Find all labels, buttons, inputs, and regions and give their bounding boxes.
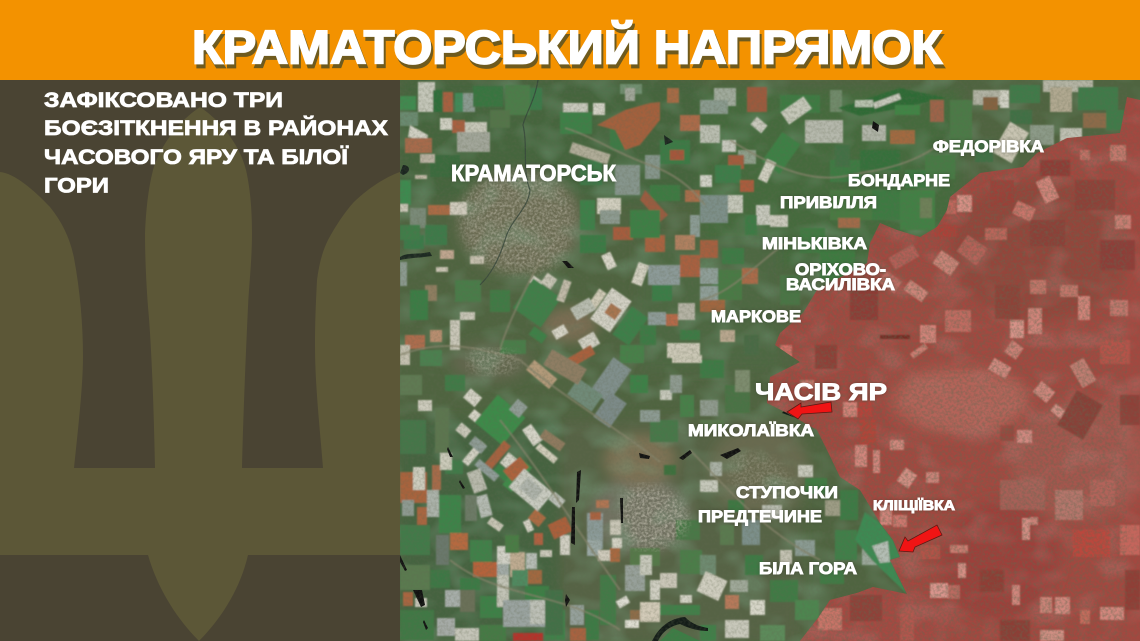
side summary text: ГОРИ xyxy=(44,174,109,198)
label: Orikhovo-Vasylivka xyxy=(786,261,895,294)
label: Mykolaivka: МИКОЛАЇВКА xyxy=(688,422,814,440)
label: Stupochky: СТУПОЧКИ xyxy=(736,484,838,502)
side summary text: БОЄЗІТКНЕННЯ В РАЙОНАХ xyxy=(44,115,389,140)
label: Fedorivka: ФЕДОРІВКА xyxy=(933,138,1044,156)
red overlay: Chasiv Yar town texture xyxy=(912,379,1016,424)
label: Orikhovo-Vasylivka: ОРІХОВО- xyxy=(795,261,886,279)
map labels: settlements xyxy=(451,138,1044,578)
label: Minkivka: МІНЬКІВКА xyxy=(762,235,867,253)
label: Markove: МАРКОВЕ xyxy=(711,308,801,326)
map: base terrain xyxy=(400,80,1140,641)
map: farm fields south-west xyxy=(400,345,907,641)
title: КРАМАТОРСЬКИЙ НАПРЯМОК xyxy=(192,20,942,74)
label: Bondarne: БОНДАРНЕ xyxy=(848,172,950,190)
label: Bila Hora: БІЛА ГОРА xyxy=(759,560,857,578)
arrow: towards Chasiv Yar xyxy=(787,402,832,419)
map: ponds and rivers xyxy=(400,80,879,641)
map: town textures Kramatorsk and others xyxy=(460,172,795,549)
label: Klishchiivka: КЛІЩІЇВКА xyxy=(873,497,955,513)
label: Predtechyne: ПРЕДТЕЧИНЕ xyxy=(698,508,822,526)
satellite map xyxy=(400,80,1140,641)
map: occupied territory red overlay xyxy=(760,90,1140,641)
label: Orikhovo-Vasylivka: ВАСИЛІВКА xyxy=(786,276,895,294)
side summary text: ЗАФІКСОВАНО ТРИ xyxy=(44,88,283,112)
side summary text xyxy=(44,88,389,198)
map: tree lines and dirt tracks xyxy=(400,128,945,630)
side summary text: ЧАСОВОГО ЯРУ ТА БІЛОЇ xyxy=(44,145,349,169)
map: farm fields west and north xyxy=(400,80,1124,365)
header bar xyxy=(0,0,1140,80)
label: Chasiv Yar: ЧАСІВ ЯР xyxy=(755,379,887,406)
trident emblem watermark xyxy=(0,107,400,641)
map: background patchwork xyxy=(400,85,1040,641)
label: Pryvillia: ПРИВІЛЛЯ xyxy=(780,194,877,212)
left panel background xyxy=(0,80,400,641)
arrow: towards Klishchiivka xyxy=(899,525,942,552)
label: Kramatorsk: КРАМАТОРСЬК xyxy=(451,160,617,186)
red overlay: fields xyxy=(780,145,1140,641)
map: photo grain xyxy=(400,80,1127,641)
